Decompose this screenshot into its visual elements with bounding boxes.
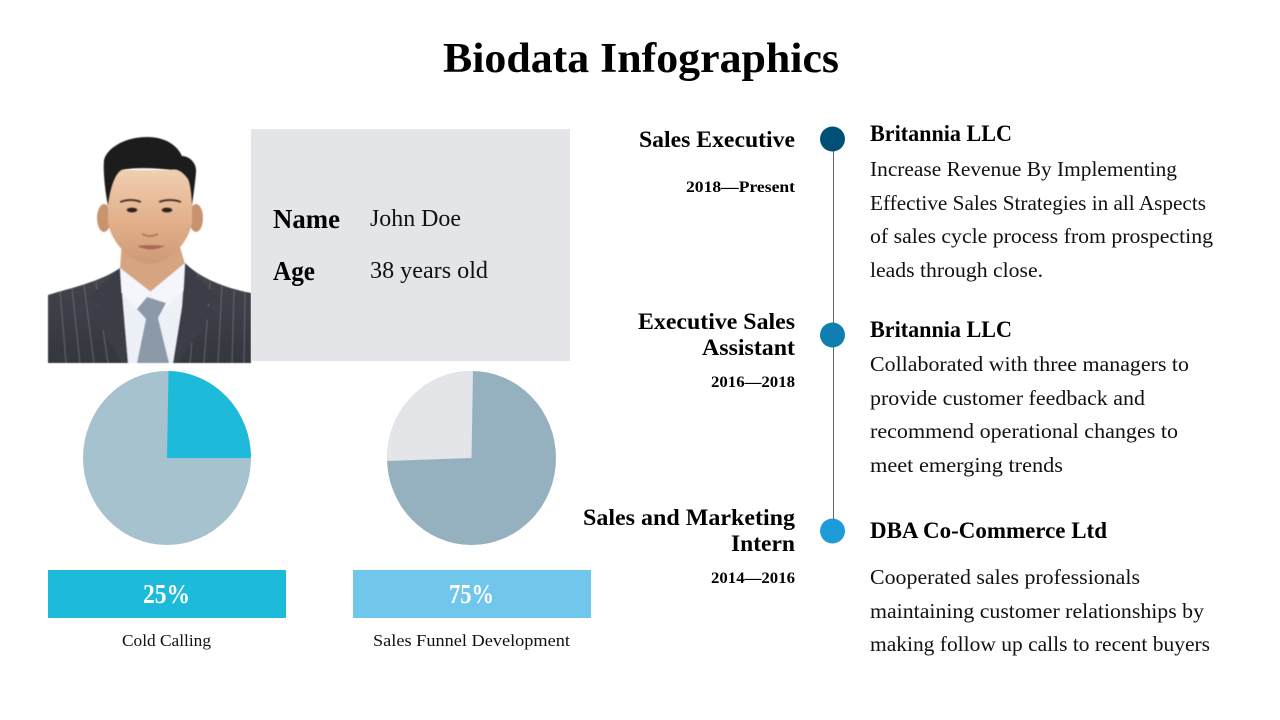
photo: portrait of man in suit: [48, 137, 251, 363]
job 2 description: Britannia LLC: [870, 317, 1012, 342]
role: executive sales assistant: 2016—2018: [711, 374, 795, 391]
panel: name and age: [251, 129, 570, 361]
ears: [97, 204, 111, 232]
pinstripes: [60, 275, 245, 363]
caption: sales funnel development: Sales Funnel Development: [373, 631, 570, 650]
role: sales and marketing intern: [583, 505, 796, 587]
stat bar: 25%: 25%: [143, 579, 190, 609]
lapels: [88, 263, 217, 363]
job 1 description: of sales cycle process from prospecting: [870, 224, 1214, 248]
job 1 description: [870, 121, 1214, 282]
eyes and brows: [120, 200, 181, 202]
job 3 description: Cooperated sales professionals: [870, 565, 1140, 589]
job 1 description: Effective Sales Strategies in all Aspects: [870, 191, 1206, 215]
job 3 description: making follow up calls to recent buyers: [870, 632, 1210, 656]
age label: Age: [273, 256, 315, 286]
collar: [120, 263, 186, 310]
job 1 description: Britannia LLC: [870, 121, 1012, 146]
job 1 description: leads through close.: [870, 258, 1043, 282]
role: sales executive: [639, 127, 796, 196]
tie: [137, 297, 169, 363]
shirt: [120, 263, 185, 363]
caption: cold calling: Cold Calling: [122, 631, 211, 650]
stat bar: 75%: 75%: [449, 579, 494, 609]
role: sales and marketing intern: 2014—2016: [711, 570, 795, 587]
role: sales and marketing intern: Sales and Marketing: [583, 505, 796, 530]
job 3 description: maintaining customer relationships by: [870, 599, 1205, 623]
timeline: [820, 126, 845, 544]
job 2 description: provide customer feedback and: [870, 386, 1146, 410]
role: executive sales assistant: Executive Sales: [638, 309, 795, 334]
role: sales and marketing intern: Intern: [731, 531, 795, 556]
stat bar: 25%: [48, 570, 286, 618]
mouth: [137, 245, 165, 250]
name value: John Doe: [370, 206, 461, 232]
timeline dot 3: [820, 518, 845, 544]
name label: Name: [273, 204, 340, 234]
nose: [142, 234, 158, 236]
job 3 description: DBA Co-Commerce Ltd: [870, 518, 1107, 543]
job 2 description: Collaborated with three managers to: [870, 352, 1189, 376]
role: sales executive: 2018—Present: [686, 179, 796, 196]
role: executive sales assistant: [638, 309, 795, 391]
face: [108, 170, 192, 264]
pie chart: cold calling 25%: [83, 371, 251, 545]
neck: [120, 240, 185, 292]
job 3 description: [870, 518, 1210, 656]
hair: [104, 137, 196, 206]
job 1 description: Increase Revenue By Implementing: [870, 157, 1177, 181]
age value: 38 years old: [370, 258, 488, 284]
title: Biodata Infographics: [443, 36, 839, 82]
job 2 description: [870, 317, 1189, 477]
job 2 description: recommend operational changes to: [870, 419, 1178, 443]
role: sales executive: Sales Executive: [639, 127, 795, 152]
stat bar: 75%: [353, 570, 591, 618]
timeline dot 2: [820, 322, 845, 348]
job 2 description: meet emerging trends: [870, 453, 1063, 477]
role: executive sales assistant: Assistant: [702, 335, 795, 360]
pie chart: sales funnel development 75%: [387, 371, 556, 545]
jacket: [48, 263, 251, 363]
timeline dot 1: [820, 126, 845, 152]
